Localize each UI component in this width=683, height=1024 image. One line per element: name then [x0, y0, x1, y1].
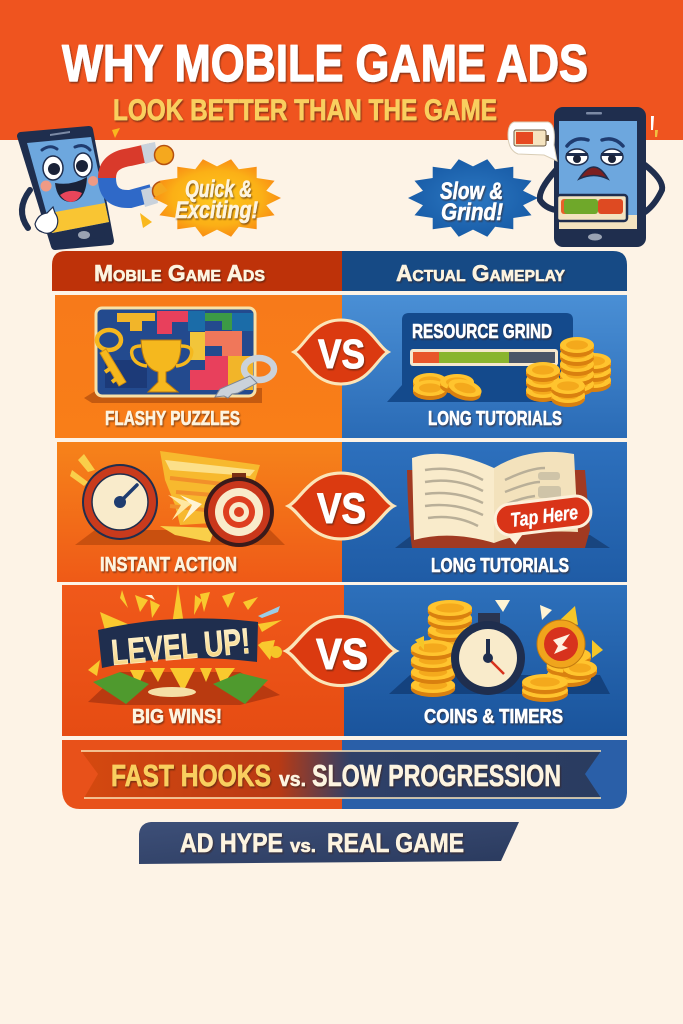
vs badge: VS	[317, 485, 366, 533]
ribbon: fast hooks vs slow progression: FAST HOOKS	[111, 758, 271, 793]
panel: comparison table	[52, 251, 627, 809]
panel: coins and timers	[344, 585, 627, 736]
label: LONG TUTORIALS	[428, 407, 562, 430]
ribbon: fast hooks vs slow progression: SLOW PROGRESSION	[312, 758, 561, 793]
icon: level up banner with cash: LEVEL UP!	[110, 620, 252, 673]
icon: open book with tap here bubble	[395, 452, 610, 548]
ribbon: fast hooks vs slow progression: vs.	[279, 769, 306, 791]
label: FLASHY PUZZLES	[105, 407, 240, 430]
icon: happy phone mascot	[21, 130, 110, 246]
row 1	[55, 295, 627, 438]
icon: puzzle board with trophy and keys	[84, 308, 274, 403]
ribbon: fast hooks vs slow progression	[81, 751, 601, 798]
header band	[0, 0, 683, 140]
callout: slow and grind burst: Grind!	[441, 199, 503, 226]
icon: magnet attracting coins	[107, 128, 174, 228]
callout: slow and grind burst: Slow &	[440, 178, 503, 205]
label: BIG WINS!	[132, 705, 222, 728]
column header: mobile game ads	[52, 251, 342, 291]
icon: resource bar and coins	[387, 313, 611, 407]
icon: tired phone mascot	[540, 107, 662, 247]
column header: actual gameplay	[342, 251, 627, 291]
banner: ad hype vs real game: vs.	[290, 836, 316, 856]
label: LONG TUTORIALS	[431, 554, 569, 577]
icon: resource bar and coins: RESOURCE GRIND	[412, 320, 552, 343]
label: INSTANT ACTION	[100, 553, 237, 576]
vs badge: VS	[316, 630, 368, 679]
icon: open book with tap here bubble: Tap Here	[509, 502, 579, 532]
banner: ad hype vs real game: AD HYPE	[180, 828, 283, 858]
row 2	[57, 442, 627, 582]
column header: mobile game ads: Mobile Game Ads	[94, 260, 265, 286]
subtitle: LOOK BETTER THAN THE GAME	[113, 94, 497, 127]
icon: level up banner with cash	[88, 585, 282, 705]
vs badge	[288, 473, 394, 539]
panel: resource grind	[342, 295, 627, 438]
vs badge	[294, 320, 388, 384]
panel: flashy puzzles	[55, 295, 342, 438]
vs badge	[286, 616, 396, 686]
panel: long tutorials	[342, 442, 627, 582]
callout: quick and exciting burst	[153, 159, 281, 237]
column header: actual gameplay: Actual Gameplay	[396, 260, 565, 286]
icon: coins and stopwatch	[389, 600, 610, 702]
icon: low battery speech bubble	[508, 122, 557, 161]
panel: big wins	[62, 585, 344, 736]
title: WHY MOBILE GAME ADS	[62, 35, 588, 93]
banner: ad hype vs real game	[139, 822, 519, 864]
vs badge: VS	[318, 331, 365, 377]
icon: clock and target	[70, 451, 285, 547]
label: COINS & TIMERS	[424, 705, 563, 728]
callout: quick and exciting burst: Exciting!	[175, 197, 258, 224]
panel: summary row	[62, 740, 627, 809]
banner: ad hype vs real game: REAL GAME	[327, 828, 464, 858]
callout: quick and exciting burst: Quick &	[185, 176, 252, 203]
callout: slow and grind burst	[408, 159, 538, 237]
panel: instant action	[57, 442, 342, 582]
row 3	[62, 585, 627, 736]
